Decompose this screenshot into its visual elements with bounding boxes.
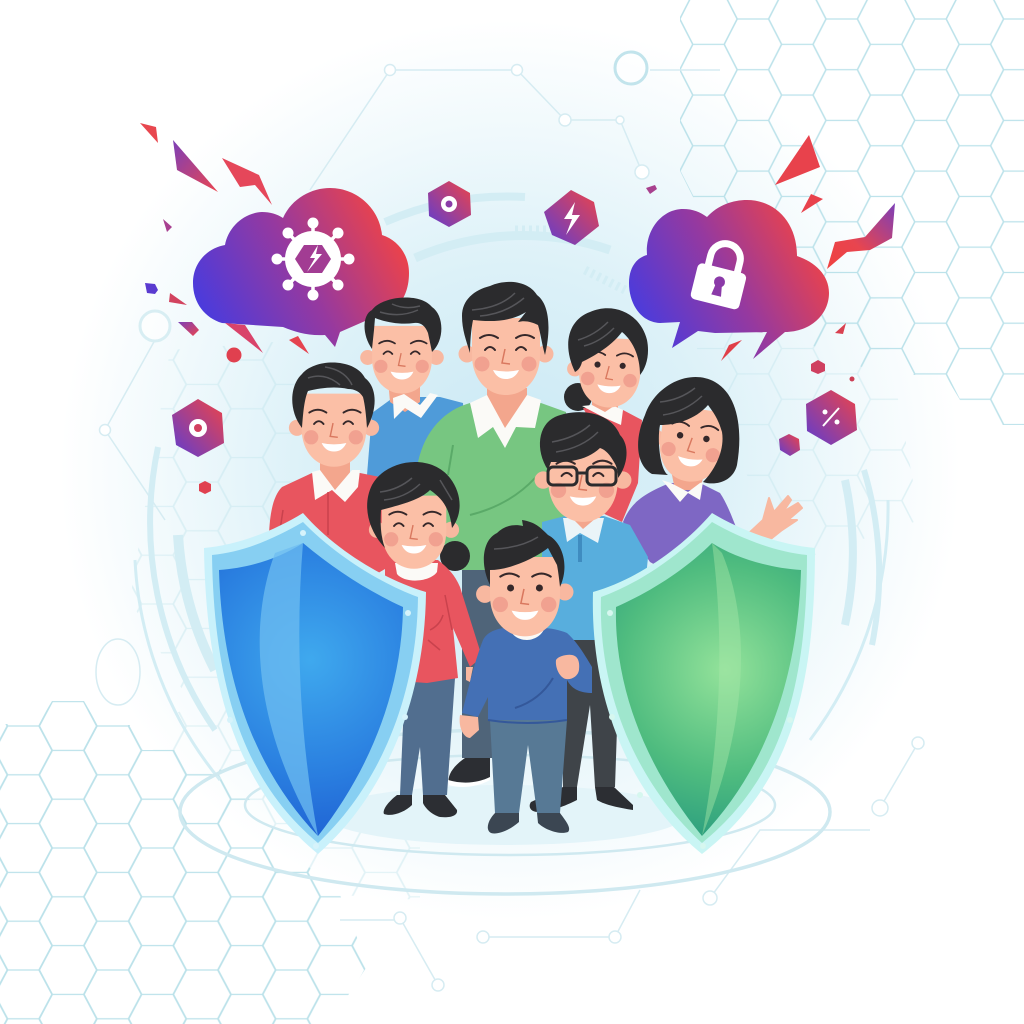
green shield — [593, 513, 815, 854]
icon: virus — [272, 218, 354, 300]
blue shield — [204, 513, 426, 854]
person: man with glasses in light blue shirt — [530, 412, 648, 812]
hexagon grid top right — [680, 0, 1024, 425]
hex badge: percent — [806, 390, 857, 445]
right shards — [646, 135, 895, 382]
left shards — [140, 123, 309, 494]
floor rings — [180, 730, 830, 894]
hex badge: small — [779, 434, 800, 456]
ring node top — [615, 52, 647, 84]
hex badge: left target — [172, 399, 224, 457]
person: tall man in green sweater — [418, 282, 566, 787]
icon: padlock — [690, 238, 753, 310]
right threat cloud — [629, 200, 829, 359]
person: woman in purple sweater — [623, 377, 802, 590]
waving hand — [738, 496, 802, 548]
glasses — [548, 467, 616, 485]
faint hexagons inside sphere — [130, 230, 920, 900]
hex badge: lightning — [544, 190, 599, 245]
hexagon grid bottom left — [0, 701, 368, 1024]
circuit lines and nodes — [96, 64, 924, 991]
person: boy in blue sweater — [460, 520, 592, 833]
hex badge: top target — [428, 181, 471, 227]
ring node left — [140, 311, 170, 341]
person: man in red sweater — [269, 362, 400, 590]
person: girl in red cardigan — [367, 462, 482, 817]
person: man in blue sweater — [360, 297, 470, 520]
concentric technology arcs — [135, 196, 888, 780]
person: woman in red top — [564, 308, 648, 522]
left threat cloud — [193, 188, 409, 347]
